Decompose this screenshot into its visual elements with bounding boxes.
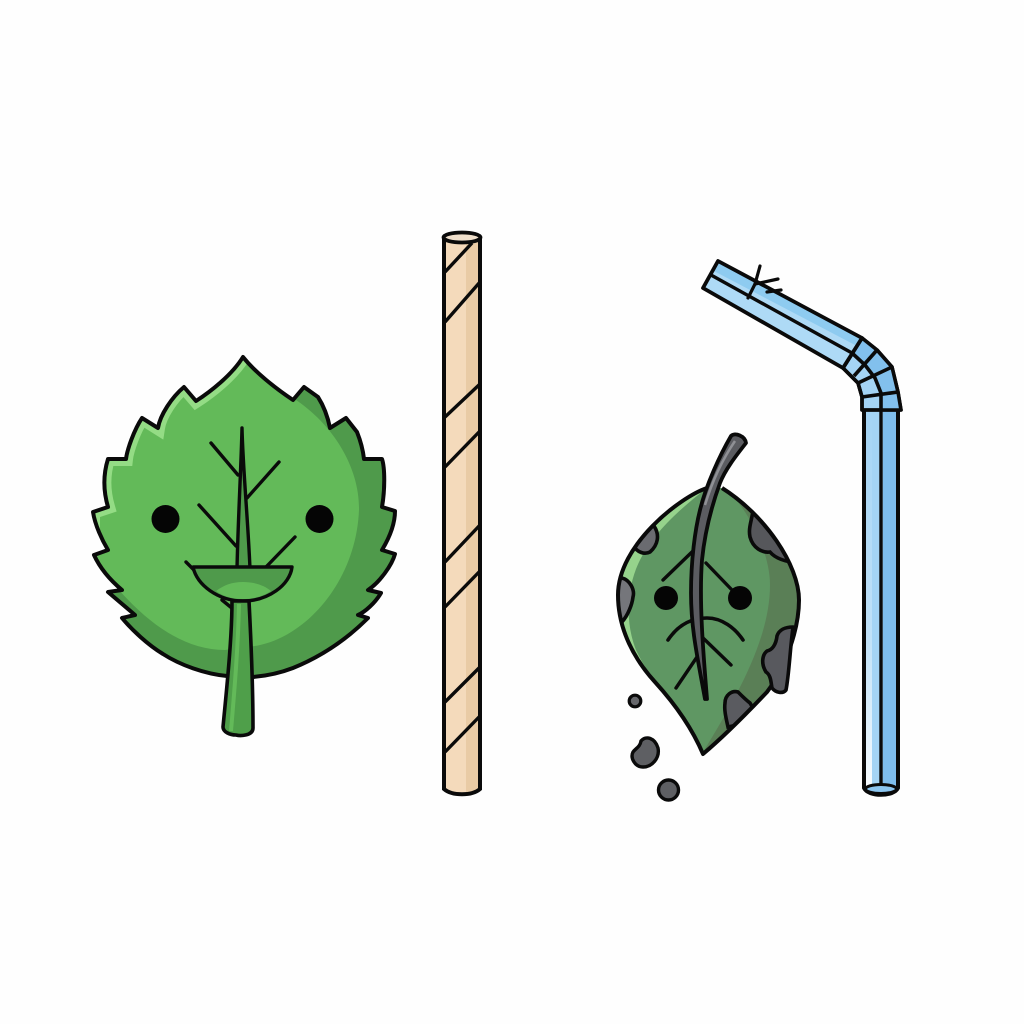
leaf body xyxy=(620,488,797,751)
midrib xyxy=(237,428,250,569)
lower stem xyxy=(223,601,253,735)
cracked damage marks xyxy=(748,266,781,298)
vertical tube xyxy=(864,410,898,795)
leaf outline xyxy=(93,357,395,677)
midrib top dark tip xyxy=(240,428,245,470)
debris: round dot xyxy=(658,780,678,800)
blotch: left xyxy=(620,576,636,623)
stem highlight xyxy=(705,441,735,505)
veins xyxy=(663,551,732,688)
healthy leaf xyxy=(85,340,405,735)
sad mouth xyxy=(668,618,743,640)
spiral stripes xyxy=(445,243,480,752)
bendy plastic straw xyxy=(703,261,901,795)
sad polluted leaf xyxy=(610,434,805,800)
stem highlight xyxy=(231,604,239,731)
paper straw xyxy=(444,232,480,794)
upper tube xyxy=(703,261,862,368)
straw body xyxy=(444,236,480,794)
straw outline xyxy=(444,238,480,794)
blotch: upper left xyxy=(634,520,657,553)
right eye xyxy=(728,586,752,610)
straw top opening xyxy=(444,232,480,242)
leaf outline xyxy=(618,488,799,754)
smile bowl xyxy=(193,567,292,601)
blotch: upper right xyxy=(748,513,787,563)
right eye xyxy=(306,505,334,533)
side veins xyxy=(186,443,295,609)
debris: blob xyxy=(632,738,658,767)
debris: small dot xyxy=(629,695,641,707)
leaf body xyxy=(95,360,393,675)
stem xyxy=(691,434,746,699)
straw shaded side xyxy=(466,236,480,794)
left eye xyxy=(654,586,678,610)
dripping blotch xyxy=(763,627,793,692)
flexible bend xyxy=(843,338,901,410)
illustration: natural vs plastic comparison xyxy=(91,230,903,802)
blotch: bottom xyxy=(725,692,760,727)
left eye xyxy=(152,505,180,533)
